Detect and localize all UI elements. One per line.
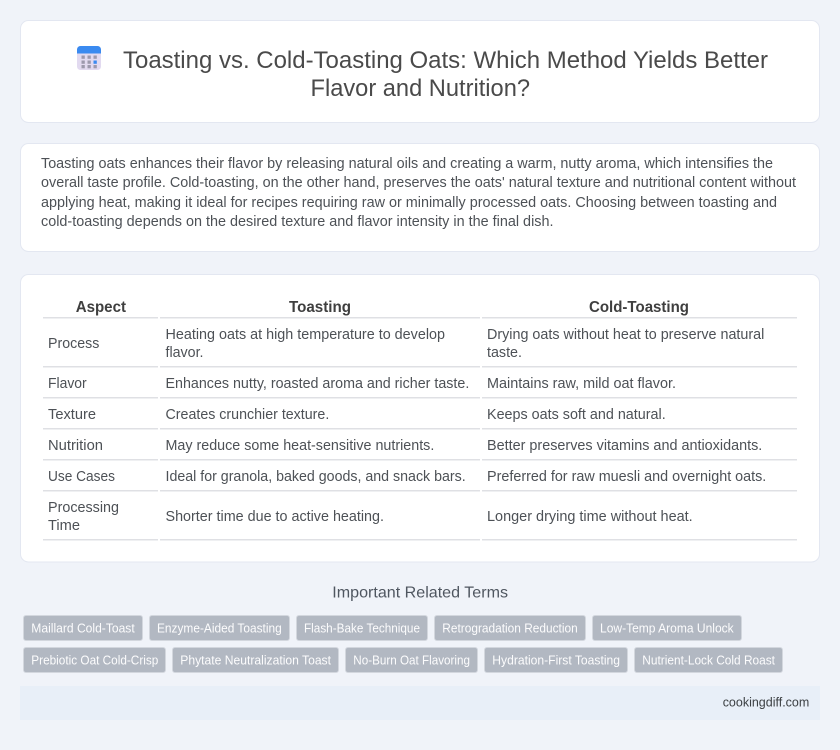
table header row: Cold-Toasting [589,299,689,316]
tags: related terms: Hydration-First Toasting [492,653,620,667]
table row: flavor: Maintains raw, mild oat flavor. [487,376,676,392]
panel: comparison table [20,274,820,562]
table row: process: Drying oats without heat to preserve natural [487,327,764,343]
table row: processing time: Longer drying time without heat. [487,509,693,525]
text block: introduction paragraph: Toasting oats enhances their flavor by releasing natural oils and creating a warm, nutty aroma, which intensifies the [41,156,773,172]
table row: processing time: Time [48,518,80,534]
table row: process: Heating oats at high temperature to develop [166,327,445,343]
panel: header [20,20,820,122]
table row: processing time [43,500,797,540]
table row: processing time: Processing [48,500,119,516]
text block: introduction paragraph: overall taste profile. Cold-toasting, on the other hand, preserves the oats' natural texture and nutritional content without [41,175,796,191]
table row: process: flavor. [166,345,204,361]
table row: use cases: Use Cases [48,469,115,485]
table row: nutrition: Better preserves vitamins and antioxidants. [487,438,762,454]
table row: flavor: Enhances nutty, roasted aroma and richer taste. [166,376,469,392]
tags: related terms: Enzyme-Aided Toasting [157,621,282,635]
footer: cookingdiff.com [723,695,809,710]
table row: nutrition [43,438,797,460]
tags: related terms [24,616,782,672]
title: Toasting vs. Cold-Toasting Oats: Which Method Yields Better [123,47,768,74]
table row: use cases [43,469,797,492]
icon: calendar [77,46,101,70]
tags: related terms: No-Burn Oat Flavoring [353,653,470,667]
tags: related terms: Maillard Cold-Toast [31,621,135,635]
text block: introduction paragraph [41,156,796,230]
panel: introduction [20,144,820,252]
table row: nutrition: May reduce some heat-sensitive nutrients. [166,438,434,454]
tags: related terms: Nutrient-Lock Cold Roast [642,653,775,667]
table row: flavor: Flavor [48,376,87,392]
table row: process: Process [48,336,99,352]
table row: process: taste. [487,345,522,361]
table row: texture: Creates crunchier texture. [166,407,329,423]
text block: introduction paragraph: applying heat, making it ideal for recipes requiring raw or minimally processed oats. Choosing between toasting and [41,195,777,211]
table row: use cases: Preferred for raw muesli and overnight oats. [487,469,766,485]
title [123,47,768,102]
tags: related terms: Flash-Bake Technique [304,621,420,635]
heading: important related terms: Important Related Terms [332,584,508,602]
tags: related terms: Phytate Neutralization Toast [180,653,332,667]
table row: process [43,327,797,368]
table header row: Aspect [76,299,127,316]
table row: processing time: Shorter time due to active heating. [166,509,384,525]
text block: introduction paragraph: cold-toasting depends on the desired texture and flavor intensity in the final dish. [41,214,554,230]
table row: texture: Keeps oats soft and natural. [487,407,666,423]
table row: use cases: Ideal for granola, baked goods, and snack bars. [166,469,466,485]
tags: related terms: Retrogradation Reduction [442,621,578,635]
table header row [43,299,797,318]
table row: flavor [43,376,797,398]
table header row: Toasting [289,299,351,316]
table row: texture [43,407,797,430]
footer [20,686,820,720]
table row: texture: Texture [48,407,96,423]
tags: related terms: Low-Temp Aroma Unlock [600,621,734,635]
table row: nutrition: Nutrition [48,438,103,454]
title: Flavor and Nutrition? [310,75,530,102]
tags: related terms: Prebiotic Oat Cold-Crisp [31,653,158,667]
